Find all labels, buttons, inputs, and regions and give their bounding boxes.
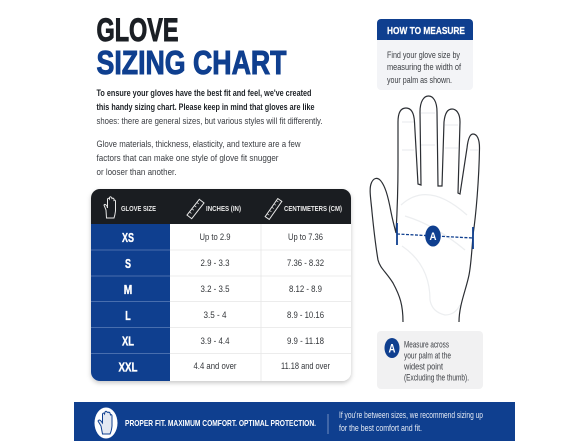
row M: M xyxy=(124,282,132,297)
banner xyxy=(74,402,515,441)
row XXL: 11.18 and over xyxy=(281,361,330,371)
header: glove size xyxy=(104,197,156,218)
header: centimeters: CENTIMETERS (CM) xyxy=(284,204,342,213)
row M: 8.12 - 8.9 xyxy=(289,284,322,294)
row XXL: XXL xyxy=(118,360,138,374)
callout: measure instruction: Measure across xyxy=(404,340,449,350)
panel: how to measure: your palm as shown. xyxy=(387,75,452,86)
row XS xyxy=(122,230,323,245)
panel: how to measure xyxy=(377,19,473,90)
panel: how to measure: Find your glove size by xyxy=(387,50,460,61)
title xyxy=(96,12,286,81)
banner: for the best comfort and fit. xyxy=(339,423,422,433)
callout: measure instruction xyxy=(377,331,483,389)
row S: 2.9 - 3.3 xyxy=(200,258,230,268)
header: inches xyxy=(187,199,241,219)
row XL xyxy=(122,334,324,348)
intro paragraph: shoes: there are general sizes, but various styles will fit differently. xyxy=(96,116,322,127)
row XL: XL xyxy=(122,334,134,348)
hand outline xyxy=(370,96,480,322)
icon: hand xyxy=(94,408,118,438)
palm creases xyxy=(401,113,478,315)
row XXL xyxy=(118,360,330,374)
row L xyxy=(125,308,324,323)
intro paragraph: To ensure your gloves have the best fit and feel, we've created xyxy=(96,88,312,99)
banner: PROPER FIT. MAXIMUM COMFORT. OPTIMAL PROTECTION. xyxy=(125,418,316,428)
row XL: 9.9 - 11.18 xyxy=(287,336,324,346)
row XS: Up to 2.9 xyxy=(200,232,231,242)
intro paragraph xyxy=(96,88,322,127)
row M xyxy=(124,282,322,297)
row S: 7.36 - 8.32 xyxy=(287,258,324,268)
row S xyxy=(125,256,324,271)
measurement line: A xyxy=(430,231,437,243)
header: glove size: GLOVE SIZE xyxy=(121,204,156,213)
sizing table xyxy=(91,189,351,381)
panel: how to measure: HOW TO MEASURE xyxy=(387,25,465,37)
header: centimeters xyxy=(265,199,342,219)
row L: L xyxy=(125,308,131,323)
measurement line xyxy=(397,223,473,249)
intro paragraph: this handy sizing chart. Please keep in mind that gloves are like xyxy=(96,102,314,113)
materials paragraph xyxy=(96,139,301,178)
row M: 3.2 - 3.5 xyxy=(200,284,230,294)
hand diagram xyxy=(370,96,480,322)
callout: measure instruction: A xyxy=(388,342,396,356)
row XL: 3.9 - 4.4 xyxy=(200,336,230,346)
materials paragraph: factors that can make one style of glove fit snugger xyxy=(96,153,278,164)
callout: measure instruction: (Excluding the thumb). xyxy=(404,372,469,384)
title: GLOVE xyxy=(96,12,178,48)
materials paragraph: Glove materials, thickness, elasticity, and texture are a few xyxy=(96,139,301,150)
banner: If you're between sizes, we recommend sizing up xyxy=(339,410,483,420)
materials paragraph: or looser than another. xyxy=(96,167,176,178)
row XXL: 4.4 and over xyxy=(194,361,237,371)
row XS: XS xyxy=(122,230,134,245)
row L: 3.5 - 4 xyxy=(204,310,227,320)
header: inches: INCHES (IN) xyxy=(206,204,241,213)
row S: S xyxy=(125,256,131,271)
callout: measure instruction: widest point xyxy=(403,362,443,372)
callout: measure instruction: your palm at the xyxy=(404,350,451,362)
row XS: Up to 7.36 xyxy=(288,232,323,242)
title: SIZING CHART xyxy=(96,44,286,81)
panel: how to measure: measuring the width of xyxy=(387,62,461,73)
row L: 8.9 - 10.16 xyxy=(287,310,324,320)
